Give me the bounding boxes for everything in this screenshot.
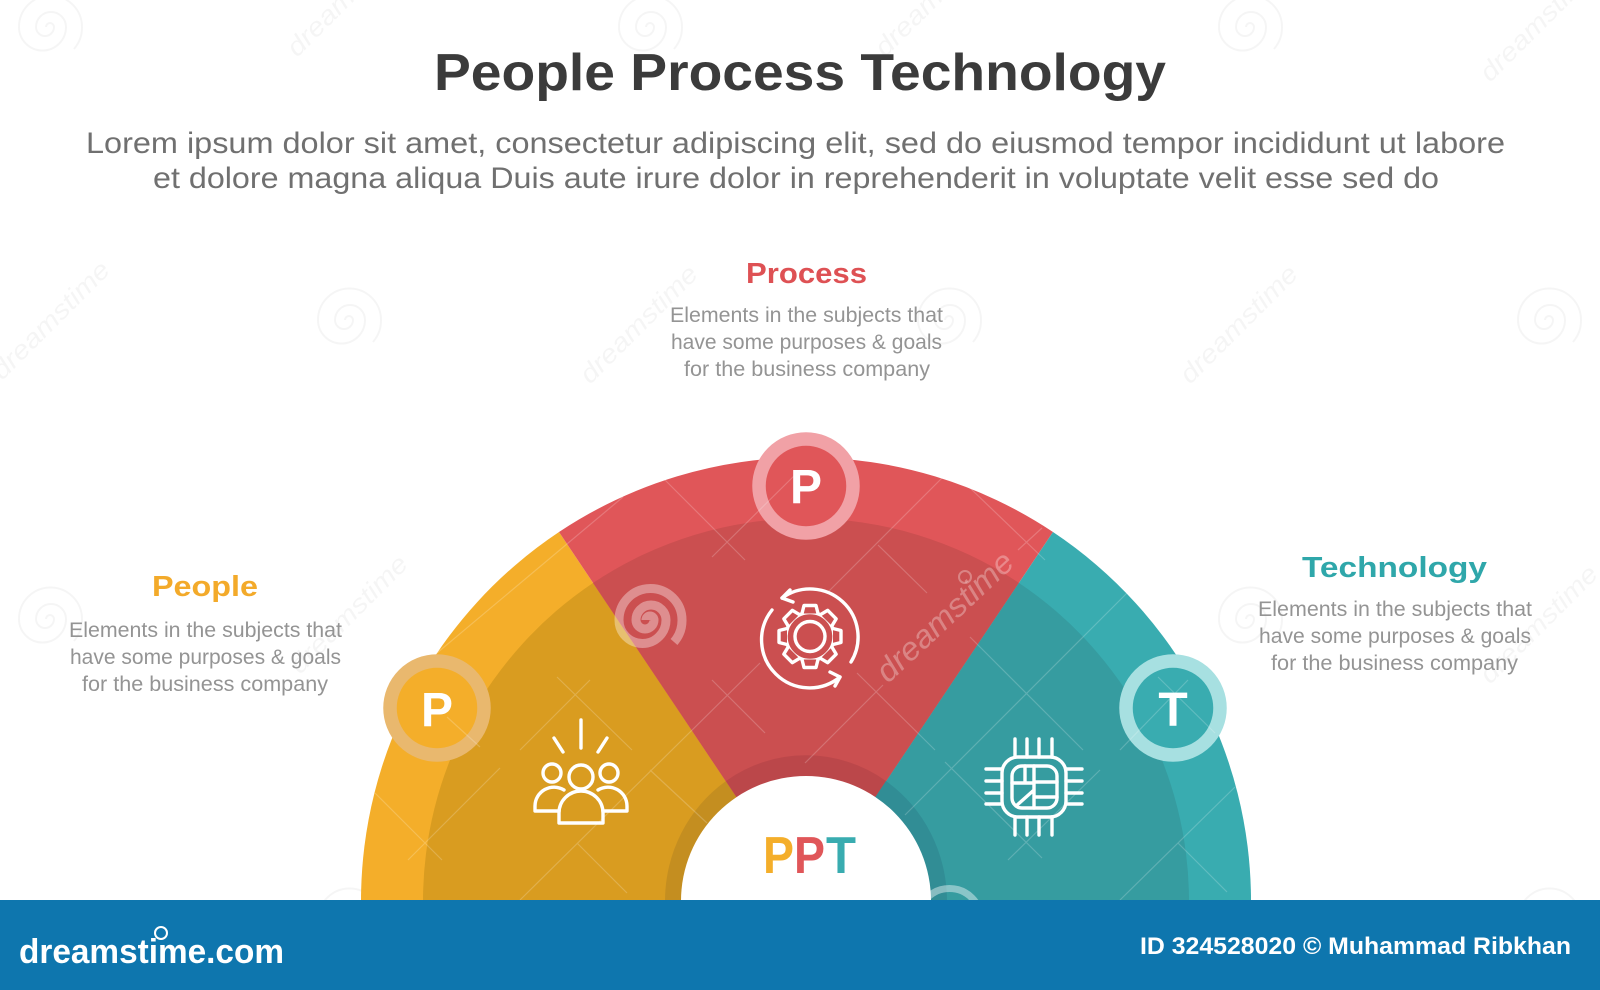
watermark spiral at chart base xyxy=(918,888,981,944)
badge: people P xyxy=(390,661,484,755)
panel: process text xyxy=(670,258,943,381)
footer credit: ID 324528020 © Muhammad Ribkhan xyxy=(1140,933,1571,960)
icon: microchip xyxy=(986,739,1082,835)
heading: Technology: Technology xyxy=(1302,552,1487,584)
watermark lines over chart xyxy=(375,470,1235,900)
heading: People: People xyxy=(152,571,258,603)
watermark text over chart: dreamstime xyxy=(868,543,1021,689)
background watermark pattern: dreamstime xyxy=(1173,258,1304,389)
badge: process P xyxy=(759,439,853,533)
badge: process P: P xyxy=(790,461,822,514)
text block: Technology description: Elements in the subjects that xyxy=(1258,598,1532,621)
subtitle xyxy=(86,127,1505,195)
badge: people P: P xyxy=(421,684,453,737)
badge: technology T: T xyxy=(1158,684,1188,737)
center hole xyxy=(681,776,931,990)
panel: technology text xyxy=(1258,552,1532,675)
text block: Technology description: have some purposes & goals xyxy=(1259,625,1531,648)
subtitle: et dolore magna aliqua Duis aute irure dolor in reprehenderit in voluptate velit esse sed do xyxy=(153,162,1439,195)
text block: People description: have some purposes & goals xyxy=(70,646,341,669)
center label PPT: T xyxy=(826,827,856,885)
text block: Technology description xyxy=(1258,598,1532,675)
text block: Process description: have some purposes & goals xyxy=(671,331,942,354)
background watermark pattern: dreamstime xyxy=(283,548,414,679)
title: People Process Technology xyxy=(434,44,1166,102)
segment: process xyxy=(559,457,1053,901)
center label PPT: P xyxy=(794,827,825,885)
watermark spiral over chart xyxy=(619,588,682,644)
background watermark pattern: dreamstime xyxy=(573,258,704,389)
footer bar xyxy=(0,900,1600,990)
semicircle chart xyxy=(361,439,1251,990)
text block: Process description: for the business company xyxy=(684,358,931,381)
segment: people xyxy=(361,532,806,901)
text block: People description: Elements in the subjects that xyxy=(69,619,342,642)
text block: Technology description: for the business company xyxy=(1271,652,1519,675)
segment: technology xyxy=(806,532,1251,901)
badge: technology T xyxy=(1126,661,1220,755)
text block: People description: for the business company xyxy=(82,673,329,696)
text block: Process description: Elements in the subjects that xyxy=(670,304,943,327)
heading: Process: Process xyxy=(746,258,867,290)
center label PPT: P xyxy=(763,827,794,885)
background watermark pattern: dreamstime xyxy=(1473,558,1600,689)
icon: people group xyxy=(535,720,627,823)
subtitle: Lorem ipsum dolor sit amet, consectetur adipiscing elit, sed do eiusmod tempor incididunt ut labore xyxy=(86,127,1505,160)
panel: people text xyxy=(69,571,342,696)
text block: People description xyxy=(69,619,342,696)
center label PPT xyxy=(763,827,856,885)
footer logo: dreamstime.com xyxy=(19,933,284,971)
text block: Process description xyxy=(670,304,943,381)
icon: gear with cycle arrows xyxy=(762,589,858,688)
